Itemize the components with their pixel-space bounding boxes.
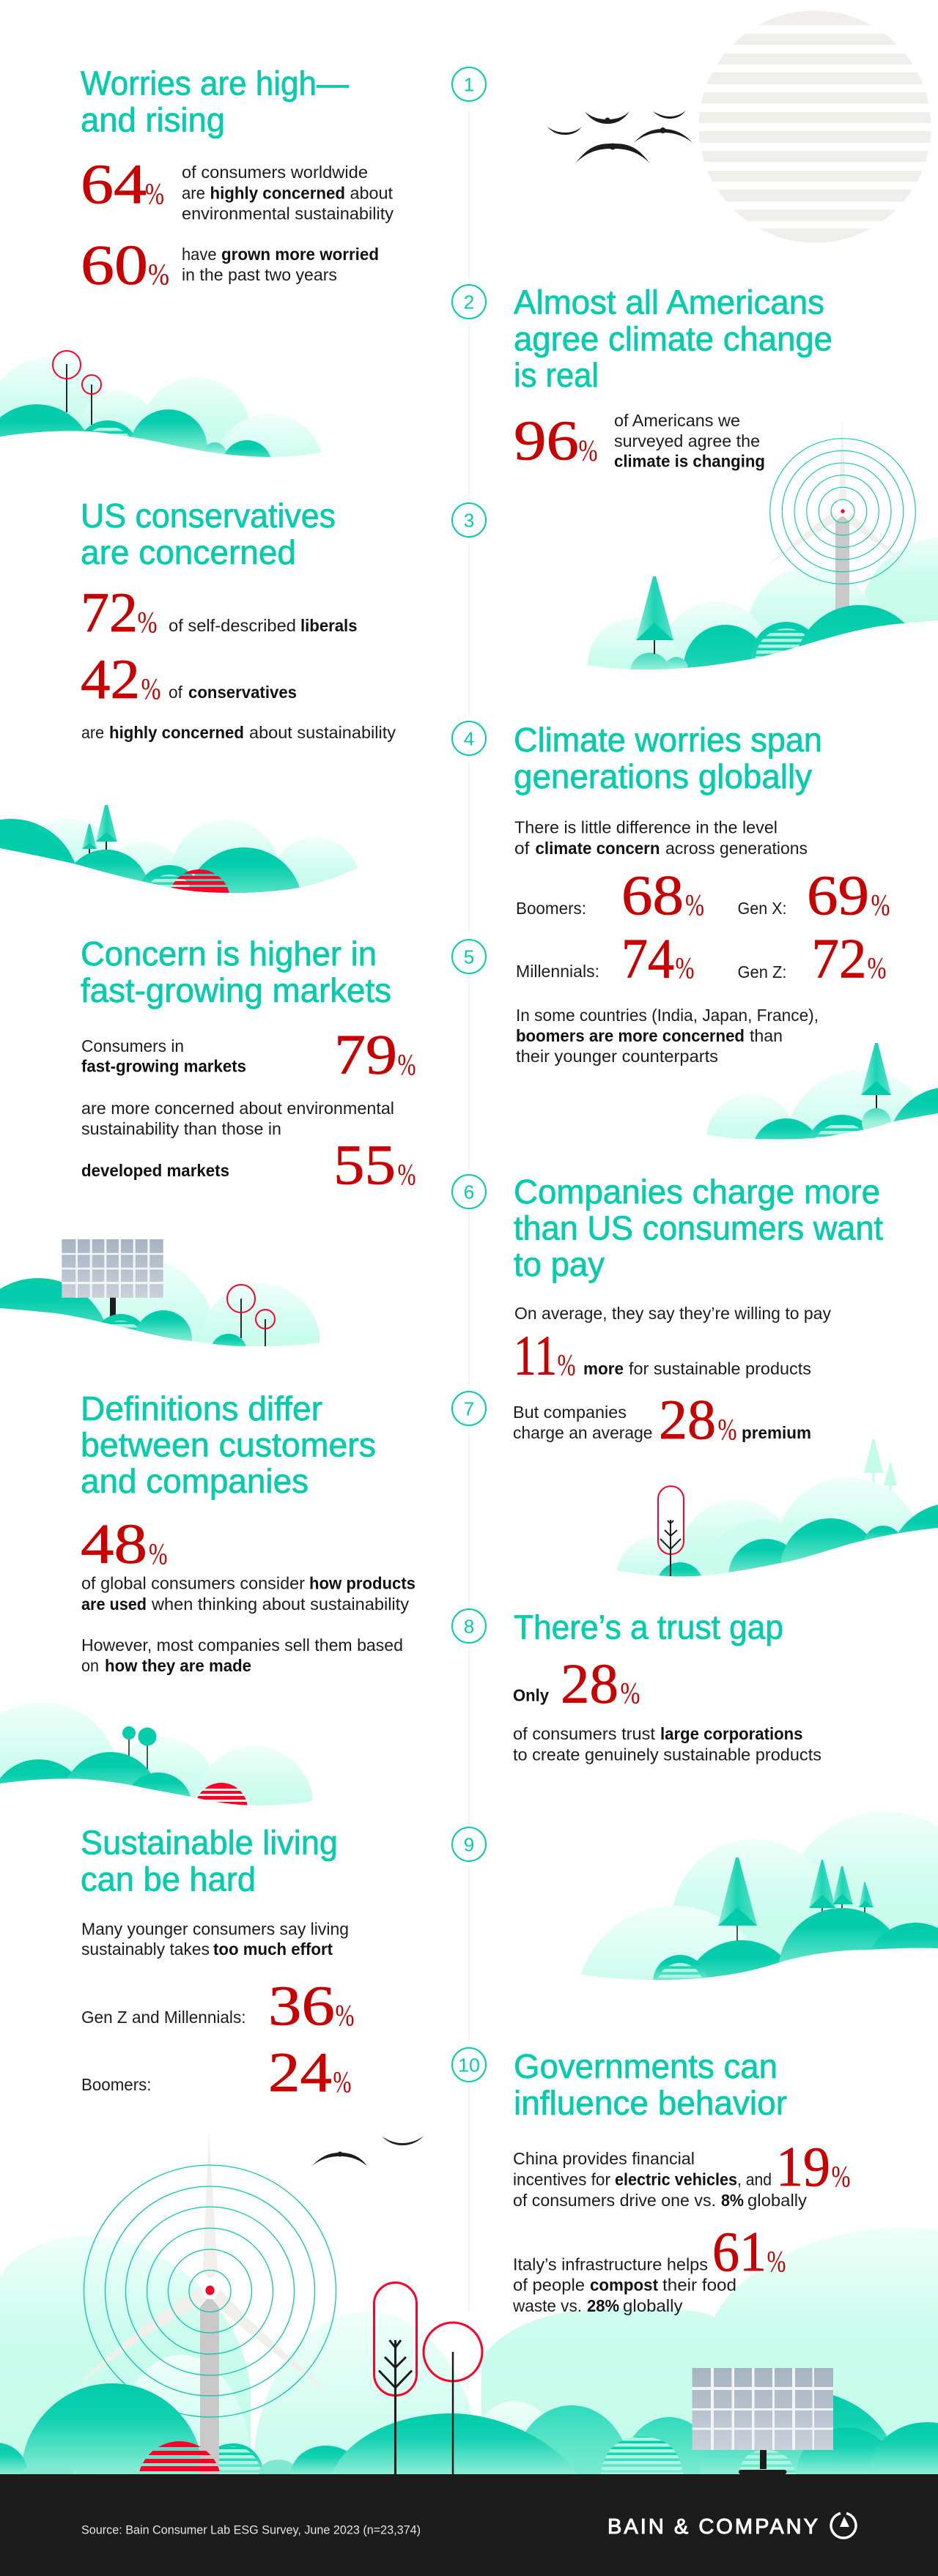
stat: Italy 61 percent: Italy’s infrastructure helps [513,2254,708,2274]
stat: boomers [516,864,704,927]
stat: 11 percent: for sustainable products [629,1359,811,1378]
stat: gen X: 69 [807,864,869,927]
stat: 48 percent: 48 [81,1512,147,1575]
stat: 64 percent: environmental sustainability [182,204,394,223]
stat: Boomers: 24 [268,2041,332,2104]
section 8: trust gap [513,1608,821,1764]
text: large corporations: to create genuinely sustainable products [513,1745,821,1764]
stat: China 19 percent: globally [747,2191,808,2210]
heading: agree climate change [514,319,832,357]
stat: 42 percent conservatives: of [169,683,183,702]
number badge 8: 8 [464,1616,474,1638]
text: too much effort: sustainably takes [81,1940,210,1959]
stat: 96 percent [514,409,765,472]
closing text: than [750,1026,783,1045]
stat: 42 percent conservatives [81,647,297,710]
stat: 64 percent: 64 [81,152,147,215]
stat: 28 percent premium: premium [742,1423,811,1442]
heading [514,721,822,795]
text: how products are used: when thinking about sustainability [151,1595,410,1614]
stat: 11 percent [514,1324,811,1387]
heading [514,2047,787,2122]
number badge 1 [452,67,486,101]
wind turbine [78,2131,332,2474]
intro text: There is little difference in the level [514,817,778,836]
stat: gen X [737,864,890,927]
stat: 79 percent: % [397,1047,416,1081]
heading [81,1824,338,1898]
heading [514,283,832,394]
section 2: almost all Americans [514,283,832,472]
stat: China 19 percent: 19 [776,2135,830,2198]
text: too much effort: Many younger consumers say living [81,1919,349,1938]
text: how they are made: how they are made [105,1656,251,1675]
heading: Climate worries span [514,721,822,759]
text: how they are made [81,1636,403,1675]
closing text: their younger counterparts [516,1047,718,1066]
text: how they are made: However, most companies sell them based [81,1636,403,1655]
stat: Italy 61 percent: waste vs. [512,2296,582,2315]
stat: 28 percent premium: 28 [659,1388,716,1451]
number badge 7: 7 [464,1398,474,1419]
stat: Boomers: Boomers: [81,2075,151,2094]
stat: 11 percent: % [557,1348,576,1381]
light background hills [0,2228,938,2576]
illustration: wind turbine and hills [588,422,938,669]
heading: than US consumers want [514,1209,883,1247]
stat: 55 percent: developed markets [81,1161,229,1180]
section 7: definitions differ [81,1389,416,1675]
illustration: hills with capsule tree [617,1439,938,1576]
stat: 96 percent: 96 [514,409,579,472]
stat: China 19 percent: electric vehicles [615,2169,737,2189]
number badge 6: 6 [464,1181,474,1203]
intro text: climate concern [535,839,660,858]
stat: 28 percent premium: charge an average [513,1423,652,1442]
stat: boomers: % [685,888,704,921]
number badge 10: 10 [458,2054,480,2076]
stat: 96 percent: climate is changing [614,451,765,470]
stat: millennials: 74 [621,927,674,990]
heading: There’s a trust gap [514,1608,783,1647]
stat: 79 percent: fast-growing markets [81,1056,246,1075]
stat: Boomers [81,2041,352,2104]
stat: boomers: Boomers: [516,899,586,918]
stat: China 19 percent: 8% [721,2191,744,2210]
section 9: sustainable living can be hard [81,1824,355,2104]
stat: 28 percent premium [513,1388,811,1451]
stat: Italy 61 percent: 61 [712,2220,767,2283]
heading: between customers [81,1425,376,1463]
heading: US conservatives [81,497,336,535]
number badge 8 [452,1609,486,1643]
text: highly concerned [81,723,396,742]
stat: 28 percent: 28 [561,1652,618,1715]
stat: 48 percent [81,1512,167,1575]
stat: 79 percent [81,1022,416,1085]
stat: Italy 61 percent [512,2220,786,2315]
capsule tree [374,2282,416,2474]
heading: are concerned [81,533,296,571]
stat: Italy 61 percent: 28% [587,2296,619,2315]
intro text: across generations [665,839,808,858]
stat: 42 percent conservatives: % [141,672,161,705]
number badge 10 [452,2048,486,2082]
source note: Source: Bain Consumer Lab ESG Survey, June 2023 (n=23,374) [81,2523,421,2537]
heading [81,497,336,571]
stat: Gen Z and Millennials [81,1974,355,2037]
intro text: of [514,839,530,858]
heading: Worries are high— [81,64,349,103]
stat: 72 percent liberals: 72 [81,581,138,644]
stat: 64 percent: highly concerned [210,183,345,202]
text: large corporations: large corporations [660,1724,803,1743]
stat: 96 percent: surveyed agree the [614,431,760,450]
number badge 6 [452,1175,486,1209]
solar panel [692,2368,833,2474]
number badge 4: 4 [464,728,474,750]
stat: 42 percent conservatives: 42 [81,647,140,710]
round tree [424,2323,482,2474]
stat: Gen Z and Millennials: % [336,1998,355,2032]
illustration: solar panel, hills, red-ring trees [0,1239,320,1346]
company logo: BAIN & COMPANY [608,2515,818,2539]
text: highly concerned: about sustainability [249,723,396,742]
stat: Boomers: % [333,2065,352,2098]
text: highly concerned: highly concerned [109,723,244,742]
stat: 72 percent liberals: of self-described [169,616,296,635]
stat: 79 percent: Consumers in [81,1036,184,1055]
body text [81,1099,394,1138]
section 4: climate worries span generations [514,721,890,1066]
body text: are more concerned about environmental [81,1099,394,1118]
heading: Governments can [514,2047,778,2085]
stat: 64 percent: about [350,183,394,202]
stat: gen Z: % [868,951,887,984]
intro text [514,817,808,858]
body text: sustainability than those in [81,1119,281,1138]
heading [81,1389,376,1500]
number badge 3: 3 [464,510,474,532]
heading: Definitions differ [81,1389,322,1428]
section 3: US conservatives [81,497,396,742]
stat: China 19 percent: % [831,2159,850,2193]
stat: 64 percent: are [182,183,205,202]
stat: 64 percent: % [145,177,164,210]
stat: Italy 61 percent: their food [662,2275,736,2294]
number badge 9: 9 [464,1834,474,1856]
heading: generations globally [514,757,812,795]
stat: 55 percent: % [397,1157,416,1191]
stat: millennials [516,927,695,990]
heading [514,1173,883,1283]
text: how products are used: are used [81,1595,147,1614]
stat: gen X: % [871,888,890,921]
stat: 64 percent: of consumers worldwide [182,163,368,182]
text: how products are used: of global consumers consider [81,1573,305,1592]
illustration: forest hills [581,1811,938,1980]
turbine hub [202,2282,217,2299]
stat: 60 percent: 60 [81,233,148,296]
heading: fast-growing markets [81,971,391,1009]
stat: 28 percent premium: But companies [513,1403,627,1422]
text: too much effort [81,1919,349,1959]
stat: 60 percent [81,233,379,296]
number badge 5: 5 [464,946,474,968]
illustration: hills with teal lollipop trees [0,1702,313,1805]
stat: 28 percent premium: % [718,1412,737,1446]
stat: Italy 61 percent: compost [590,2275,658,2294]
closing text: In some countries (India, Japan, France), [516,1006,819,1025]
stat: 55 percent [81,1133,416,1196]
text: willing to pay: On average, they say they’re willing to pay [514,1304,831,1323]
stat: China 19 percent: incentives for [513,2169,610,2189]
stat: Italy 61 percent: globally [623,2296,683,2315]
stat: 60 percent: have [182,245,217,264]
stat: Italy 61 percent: of people [513,2275,585,2294]
stat: China 19 percent [513,2135,850,2210]
heading: and companies [81,1462,309,1500]
number badge 1: 1 [464,73,474,95]
heading: Concern is higher in [81,935,377,973]
heading [81,64,349,139]
stat: gen Z [737,927,887,990]
stat: 96 percent: % [579,434,598,467]
stat: 11 percent: more [583,1359,624,1378]
heading: can be hard [81,1860,256,1898]
heading: Companies charge more [514,1173,880,1211]
section 10: governments can influence behavior [512,2047,850,2315]
stat: 72 percent liberals [81,581,358,644]
illustration: bottom landscape with turbine, trees, solar panel [0,2134,938,2474]
number badge 2 [452,285,486,319]
stat: China 19 percent: of consumers drive one vs. [513,2191,716,2210]
stat: 72 percent liberals: liberals [300,616,358,635]
stat: gen Z: 72 [812,927,866,990]
text: how products are used [81,1573,416,1614]
stat: Italy 61 percent: % [767,2244,786,2278]
stat: 60 percent: in the past two years [182,265,337,284]
stat: China 19 percent: China provides financial [513,2149,695,2168]
stat: Gen Z and Millennials: Gen Z and Millennials: [81,2008,246,2027]
number badge 2: 2 [464,292,474,313]
illustration: hills with trees and red striped dome [0,805,358,893]
text: large corporations: of consumers trust [513,1724,656,1743]
foreground teal hills [0,2383,938,2474]
illustration: hills with a tree [706,1043,938,1140]
timeline: vertical connector line [468,110,470,2311]
number badge 5 [452,940,486,973]
heading: Sustainable living [81,1824,338,1862]
heading: to pay [514,1245,605,1283]
stat: 28 percent: Only [513,1686,549,1705]
stat: 60 percent: % [148,257,169,291]
section 6: companies charge more [513,1173,883,1451]
text: too much effort: too much effort [213,1940,333,1959]
red striped dome [136,2441,224,2471]
stat: gen Z: Gen Z: [737,962,787,981]
stat: 42 percent conservatives: conservatives [188,683,297,702]
stat: 60 percent: grown more worried [221,245,379,264]
stat: 11 percent: 11 [514,1324,557,1387]
heading: influence behavior [514,2084,787,2122]
stat: 55 percent: 55 [333,1133,396,1196]
illustration: flock of birds [547,111,693,163]
stat: 72 percent liberals: % [138,605,157,639]
stat: 28 percent [513,1652,640,1715]
text: large corporations [513,1724,821,1764]
heading: and rising [81,101,225,139]
text: how they are made: on [81,1656,99,1675]
stat: China 19 percent: , and [737,2169,772,2189]
text: highly concerned: are [81,723,104,742]
number badge 3 [452,503,486,537]
illustration: hills with two red-ring trees [0,350,321,457]
closing text [516,1006,819,1066]
stat: gen X: Gen X: [737,899,787,918]
illustration: striped sun [696,10,938,243]
text: how products are used: how products [309,1573,416,1592]
stat: 28 percent: % [620,1676,640,1710]
stat: 64 percent [81,152,394,223]
stat: Gen Z and Millennials: 36 [268,1974,335,2037]
rings [84,2165,336,2417]
section 1: worries are high [81,64,394,296]
stat: millennials: % [676,951,695,984]
heading [81,935,391,1009]
stat: millennials: Millennials: [516,962,599,981]
section 5: concern higher in fast-growing markets [81,935,416,1196]
number badge 4 [452,721,486,755]
number badge 7 [452,1392,486,1425]
stat: 79 percent: 79 [334,1022,397,1085]
stat: 96 percent: of Americans we [614,411,740,430]
stat: boomers: 68 [621,864,684,927]
stat: 48 percent: % [149,1537,167,1570]
heading: Almost all Americans [514,283,824,321]
footer [0,2474,938,2576]
illustration: two birds [312,2136,424,2166]
closing text: boomers are more concerned [516,1026,745,1045]
number badge 9 [452,1827,486,1861]
heading: is real [514,356,599,394]
